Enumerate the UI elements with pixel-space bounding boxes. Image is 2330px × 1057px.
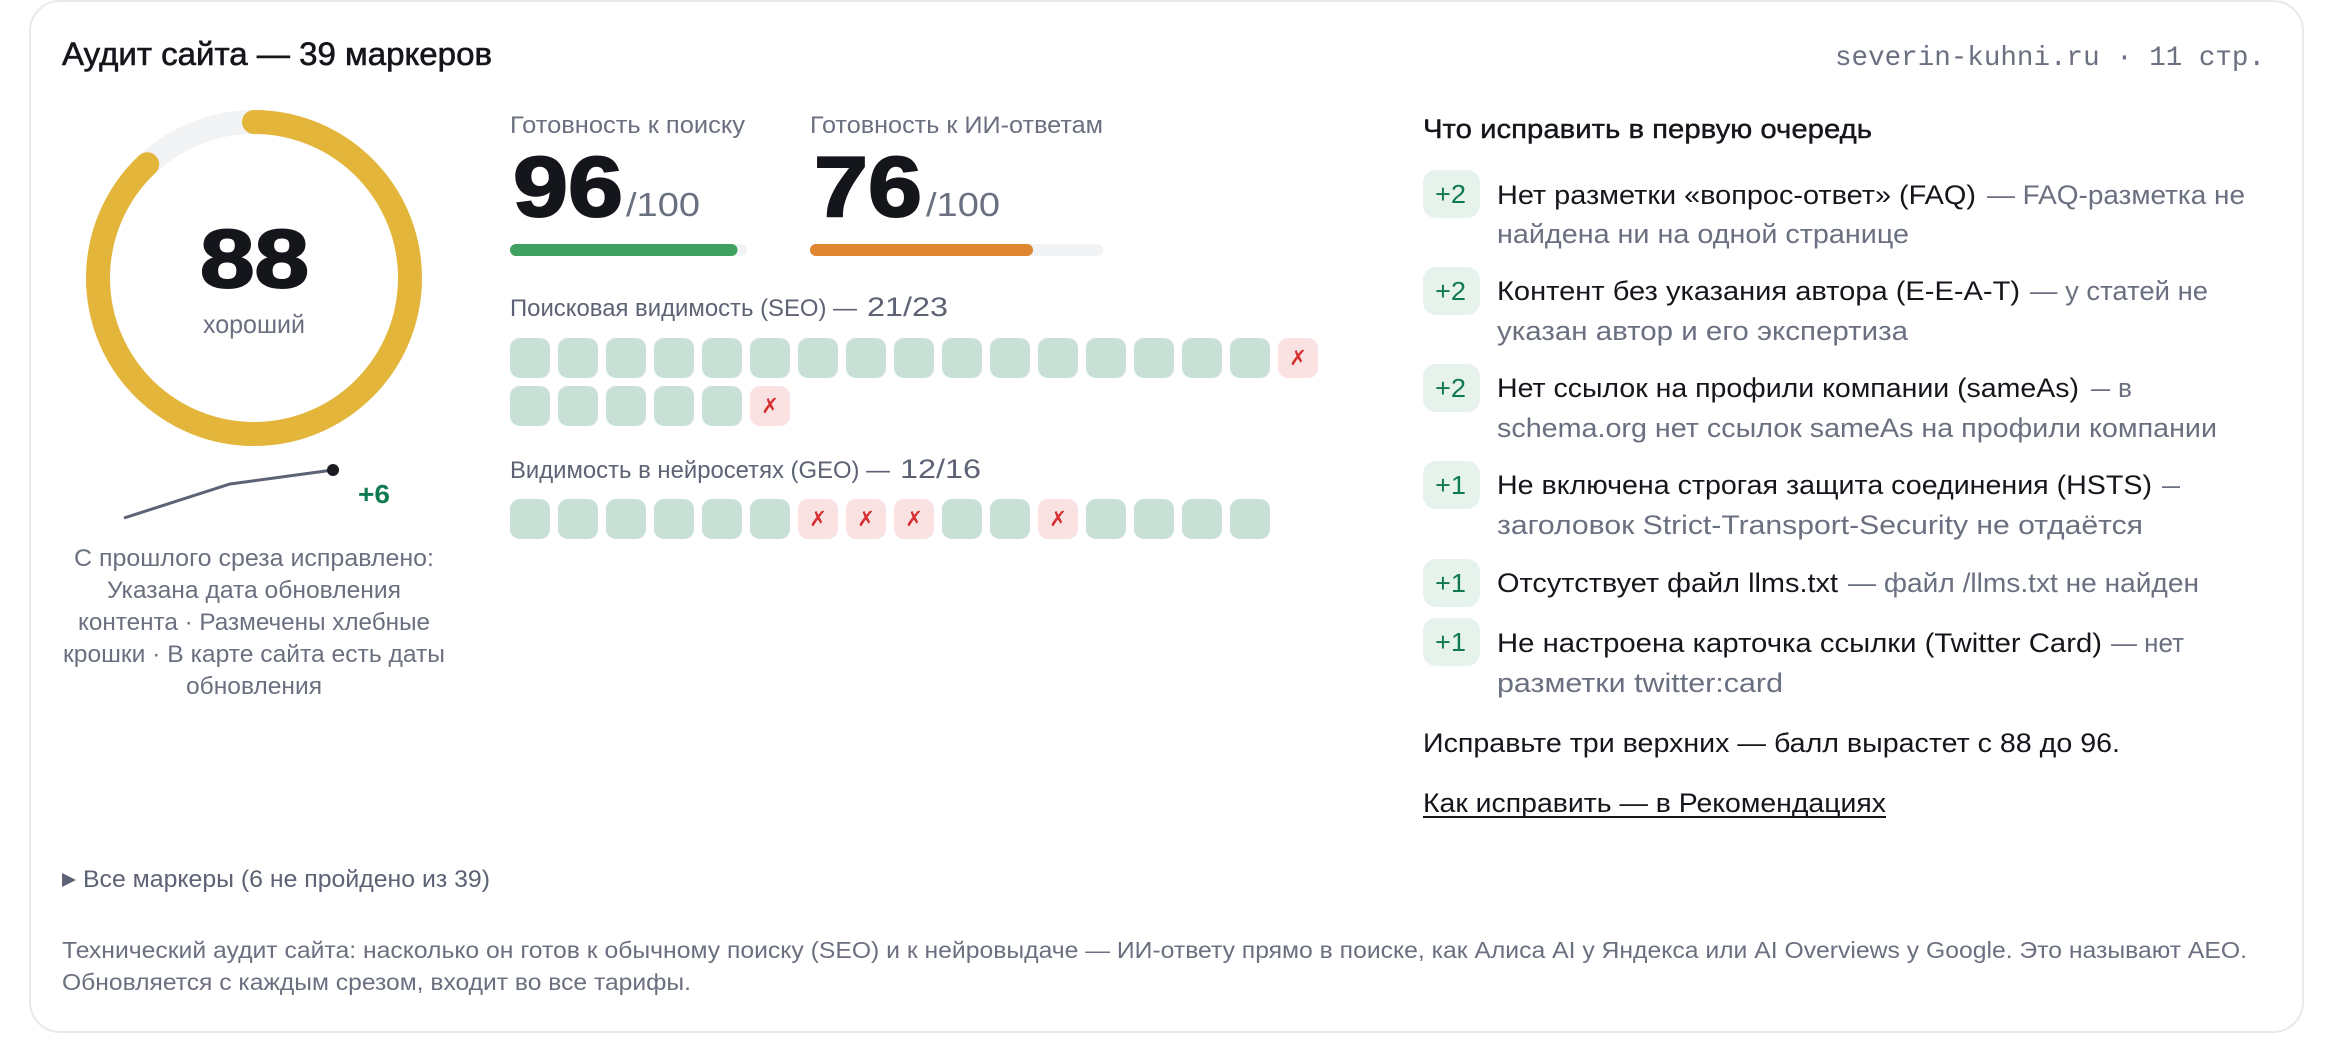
fix item: FAQ markup [1423,170,2245,249]
GEO marker tiles: ✗ [857,507,875,531]
fix item: content author: +2 [1435,276,1466,306]
SEO marker tiles: ✗ [761,394,779,418]
fix item: HSTS: заголовок Strict-Transport-Security не отдаётся [1497,510,2143,540]
GEO marker tiles: ✗ [905,507,923,531]
fix item: llms.txt: Отсутствует файл llms.txt [1497,568,1839,598]
fix item: HSTS: — [2162,470,2180,500]
fix item: Twitter Card: — нет [2111,628,2184,658]
metric: AI answers readiness [810,112,1103,256]
score ring gauge [98,122,410,434]
summary sentence: Исправьте три верхних — балл вырастет с 88 до 96. [1423,728,2120,758]
metric: search readiness [510,112,747,256]
trend delta: +6 [358,479,390,509]
score trend sparkline [124,464,390,518]
fix item: content author: Контент без указания автора (E-E-A-T) [1497,276,2020,306]
fixed since last snapshot note: С прошлого среза исправлено: [74,545,434,572]
SEO marker tiles [510,338,1318,426]
fix item: llms.txt [1423,559,2199,607]
fix item: sameAs links: Нет ссылок на профили компании (sameAs) [1497,373,2079,403]
fixed since last snapshot note [63,545,445,700]
SEO marker tiles: ✗ [1289,346,1307,370]
search progress bar [510,244,747,256]
GEO marker tiles [510,499,1270,539]
fix item: Twitter Card: +1 [1435,627,1466,657]
fix item: sameAs links: — [2091,373,2110,403]
GEO marker tiles: ✗ [809,507,827,531]
fix item: content author: указан автор и его экспертиза [1497,316,1908,346]
metric: AI answers readiness: /100 [926,186,1000,223]
SEO markers heading: 21/23 [867,292,948,322]
fix item: sameAs links: в [2118,373,2132,403]
fix item: llms.txt: +1 [1435,568,1466,598]
fix item: HSTS: +1 [1435,470,1466,500]
all markers disclosure: Все маркеры (6 не пройдено из 39) [83,866,490,893]
priorities heading: Что исправить в первую очередь [1423,114,1872,144]
fix item: FAQ markup: — FAQ-разметка не [1987,180,2245,210]
fix item: Twitter Card: разметки twitter:card [1497,668,1783,698]
fix item: content author [1423,267,2208,346]
site and pages label: severin-kuhni.ru · 11 стр. [1835,43,2265,74]
fix item: FAQ markup: Нет разметки «вопрос-ответ» (FAQ) [1497,180,1976,210]
score rating: хороший [203,309,305,339]
fix item: llms.txt: — файл /llms.txt не найден [1848,568,2199,598]
fixed since last snapshot note: обновления [186,673,322,700]
metric: AI answers readiness: Готовность к ИИ-ответам [810,112,1103,139]
AI score: 76 [814,140,922,235]
metric: search readiness: Готовность к поиску [510,112,745,139]
fixed since last snapshot note: контента · Размечены хлебные [78,609,430,636]
recommendations link: Как исправить — в Рекомендациях [1423,788,1886,818]
fix item: HSTS: Не включена строгая защита соединения (HSTS) [1497,470,2152,500]
fix item: Twitter Card: Не настроена карточка ссылки (Twitter Card) [1497,628,2102,658]
fix item: content author: — у статей не [2030,276,2208,306]
score number: 88 [200,212,309,305]
fixed since last snapshot note: крошки · В карте сайта есть даты [63,641,445,668]
fix item: Twitter Card [1423,618,2184,698]
fix item: FAQ markup: +2 [1435,179,1466,209]
fix item: sameAs links: schema.org нет ссылок sameAs на профили компании [1497,413,2217,443]
GEO markers heading: Видимость в нейросетях (GEO) — [510,457,890,484]
title: Аудит сайта — 39 маркеров [62,36,492,72]
AI progress bar [810,244,1103,256]
fix item: sameAs links [1423,364,2217,443]
metric: search readiness: /100 [626,186,700,223]
footer description [62,937,2247,995]
fix item: FAQ markup: найдена ни на одной странице [1497,219,1909,249]
footer description: Обновляется с каждым срезом, входит во все тарифы. [62,969,691,995]
GEO markers heading: 12/16 [900,454,981,484]
GEO marker tiles: ✗ [1049,507,1067,531]
fix item: HSTS [1423,461,2180,540]
footer description: Технический аудит сайта: насколько он готов к обычному поиску (SEO) и к нейровыдаче — ИИ-ответу прямо в поиске, как Алиса AI у Яндекса или AI Overviews у Google. Это называют AEO. [62,937,2247,963]
fix item: sameAs links: +2 [1435,373,1466,403]
fixed since last snapshot note: Указана дата обновления [107,577,401,604]
search score: 96 [513,140,623,235]
SEO markers heading: Поисковая видимость (SEO) — [510,295,857,322]
